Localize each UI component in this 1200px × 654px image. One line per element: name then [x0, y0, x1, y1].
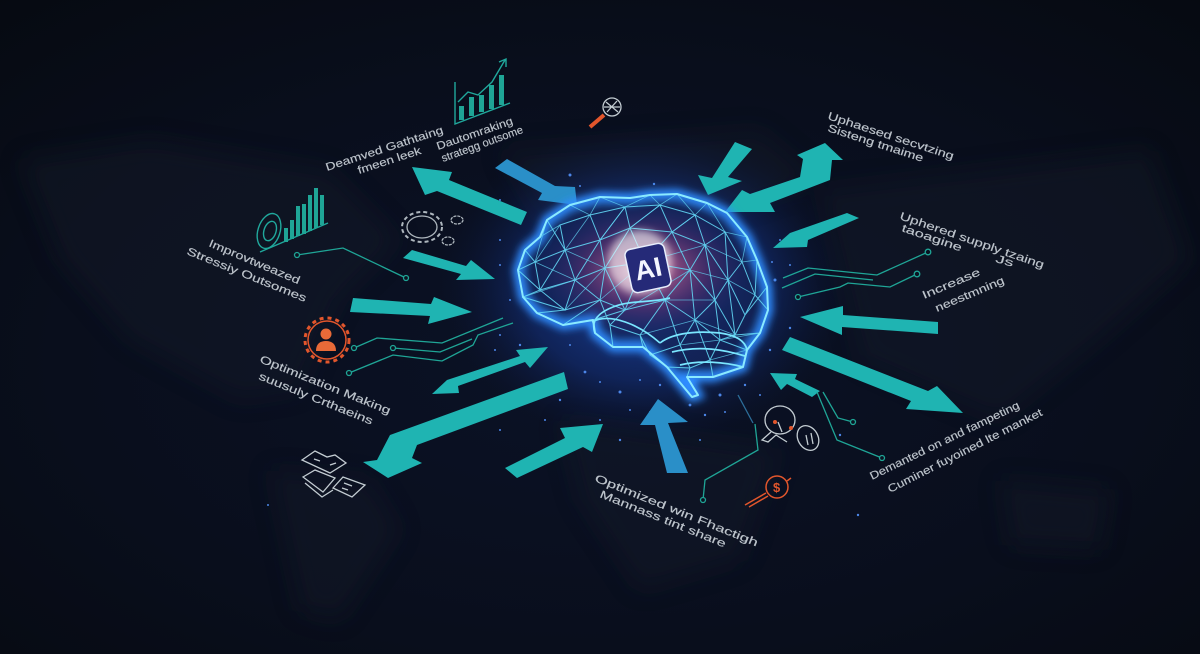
arrow: bottom blue up — [640, 399, 688, 473]
label: increase: Increase — [920, 266, 982, 302]
brain outline glow — [518, 194, 768, 397]
label: demanted bottom right — [868, 400, 1045, 496]
brain inner glow — [540, 204, 750, 336]
arrow: right inward — [800, 306, 938, 335]
label: optimization making: Optimization Making — [258, 354, 392, 417]
label: upper right: Uphaesed secvtzing — [826, 110, 955, 163]
arrow: top-left outward teal — [412, 167, 527, 225]
label: optimized bottom — [593, 473, 760, 550]
icon: orange gear person — [305, 318, 349, 362]
brain — [518, 194, 768, 397]
label: demanted bottom right: Demanted on and fampeting — [868, 400, 1022, 483]
brain outline — [518, 194, 768, 397]
label: increase: neestmning — [933, 275, 1006, 315]
label: upper right — [826, 110, 955, 165]
connector trace: strategy — [294, 248, 408, 280]
brain mesh — [518, 205, 768, 377]
arrow: lower-left long double — [363, 372, 568, 478]
arrow: left double-headed — [432, 347, 548, 394]
label: top centre: Dautomraking — [435, 115, 515, 153]
arrow: top right short — [698, 142, 752, 195]
label: supply: Uphered supply tzaing — [898, 210, 1046, 271]
label: optimized bottom: Optimized win Fhactigh — [593, 473, 760, 549]
label: supply: Js — [994, 253, 1016, 270]
brain folds — [592, 298, 747, 367]
label: supply — [898, 210, 1046, 271]
AI chip — [624, 242, 672, 294]
faint world map — [20, 130, 1190, 620]
arrow: left upper inward — [403, 250, 495, 280]
brain halo glow — [440, 125, 850, 445]
icon: chart with dial — [253, 188, 328, 252]
AI chip: AI — [632, 251, 665, 286]
label: improved strategy: Improvtweazed — [207, 238, 302, 287]
connector traces: optimization — [346, 318, 513, 376]
label: improved strategy: Stressiy Outsomes — [185, 246, 309, 305]
icon: orange money magnifier: $ — [773, 480, 781, 495]
arrow: right big outward — [782, 337, 963, 413]
label: top left — [324, 124, 445, 177]
icon: magnifier top — [590, 98, 621, 127]
arrow: left middle inward — [350, 297, 472, 324]
connector traces: supply — [782, 249, 931, 300]
label: upper right: Sisteng tmaime — [826, 122, 925, 165]
label: top left: fmeen leek — [356, 145, 423, 177]
label: optimization making — [257, 354, 392, 428]
arrow: top blue inward — [495, 159, 577, 205]
brain mesh detail — [523, 194, 760, 360]
icon: chat heads — [762, 406, 823, 454]
icon: documents — [302, 451, 365, 497]
arrow: upper right small inward — [773, 213, 859, 248]
label: improved strategy — [185, 238, 309, 305]
arrow: bottom-left inward — [505, 424, 603, 478]
label: demanted bottom right: Cuminer fuyoined lte manket — [886, 407, 1045, 496]
icon: bar chart top — [455, 59, 510, 124]
label: optimized bottom: Mannass tint share — [598, 489, 728, 550]
label: top centre: strategg outsome — [440, 124, 525, 165]
starfield particles — [267, 174, 859, 516]
label: supply: taoagine — [900, 222, 963, 254]
label: optimization making: suusuly Crthaeins — [257, 371, 375, 428]
AI chip glow — [608, 230, 672, 294]
icon: orange money magnifier — [745, 476, 791, 507]
label: increase — [920, 266, 1006, 315]
arrow: lower right small — [770, 373, 820, 397]
arrow: upper right double — [725, 143, 843, 212]
label: top left: Deamved Gathtaing — [324, 124, 445, 174]
icon: gears — [402, 212, 463, 245]
connector traces: bottom — [700, 392, 884, 502]
